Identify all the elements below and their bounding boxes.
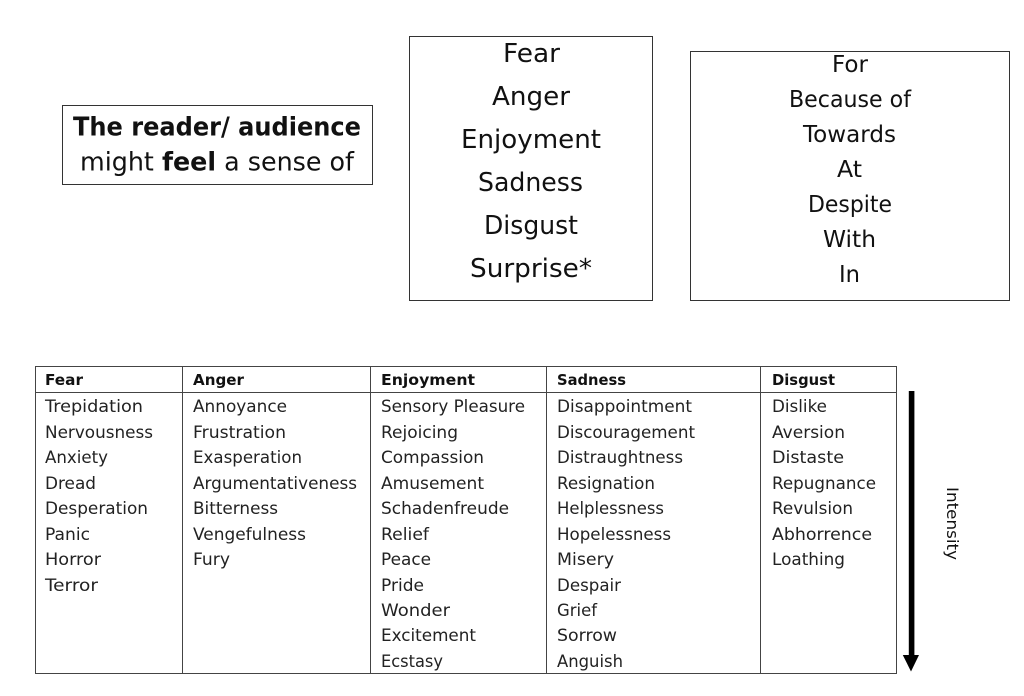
column: disgust: Disgust: [772, 371, 836, 389]
column: enjoyment: Compassion: [381, 448, 484, 467]
column: anger: Anger: [193, 371, 244, 389]
column: sadness: Resignation: [557, 474, 655, 493]
column: fear: Anxiety: [45, 448, 108, 467]
column: enjoyment: Peace: [381, 550, 431, 569]
column: enjoyment: Excitement: [381, 626, 477, 645]
column: sadness: Anguish: [557, 652, 623, 671]
column: enjoyment: Ecstasy: [381, 652, 443, 671]
box: prepositions: [690, 52, 1010, 300]
column: disgust: Distaste: [772, 448, 844, 467]
box: prepositions: At: [837, 157, 862, 183]
column: fear: Panic: [45, 525, 90, 544]
column: enjoyment: Relief: [381, 525, 430, 544]
column: enjoyment: Amusement: [381, 474, 485, 493]
box: core emotions: Disgust: [484, 211, 578, 241]
column: anger: Argumentativeness: [193, 474, 357, 493]
column: anger: Bitterness: [193, 499, 278, 518]
column: fear: Nervousness: [45, 423, 153, 442]
column: sadness: Sorrow: [557, 626, 617, 645]
box: prepositions: Because of: [789, 87, 912, 113]
box: core emotions: Surprise*: [470, 254, 592, 284]
box: core emotions: Fear: [503, 39, 560, 69]
column: sadness: Distraughtness: [557, 448, 683, 467]
box: prepositions: Towards: [802, 122, 896, 148]
box: prepositions: With: [823, 227, 876, 253]
column: fear: Trepidation: [44, 397, 143, 416]
box: core emotions: Anger: [492, 82, 570, 112]
column: sadness: Grief: [557, 601, 598, 620]
box: reader audience statement: might feel a sense of: [80, 148, 355, 178]
column: anger: Frustration: [193, 423, 286, 442]
column: disgust: Repugnance: [772, 474, 876, 493]
table: emotion intensity vocabulary: [35, 366, 896, 674]
column: fear: Dread: [45, 474, 96, 493]
column: enjoyment: Wonder: [381, 601, 450, 620]
label: intensity: Intensity: [943, 487, 962, 560]
column: fear: Fear: [45, 371, 83, 389]
box: reader audience statement: The reader/ audience: [73, 112, 361, 142]
column: enjoyment: Enjoyment: [381, 371, 476, 389]
box: core emotions: Enjoyment: [461, 125, 601, 155]
column: sadness: [557, 371, 696, 671]
column: sadness: Hopelessness: [557, 525, 671, 544]
column: sadness: Discouragement: [557, 423, 696, 442]
box: core emotions: Sadness: [478, 168, 583, 198]
column: sadness: Disappointment: [557, 397, 693, 416]
box: prepositions: In: [839, 262, 860, 288]
column: enjoyment: Schadenfreude: [381, 499, 509, 518]
column: sadness: Helplessness: [557, 499, 664, 518]
column: sadness: Sadness: [557, 371, 626, 389]
column: enjoyment: [381, 371, 525, 671]
column: anger: Fury: [193, 550, 230, 569]
column: anger: Exasperation: [193, 448, 302, 467]
column: fear: Desperation: [45, 499, 148, 518]
column: anger: Vengefulness: [193, 525, 306, 544]
box: core emotions: [410, 36, 652, 300]
column: disgust: Aversion: [772, 423, 845, 442]
column: disgust: Abhorrence: [772, 525, 872, 544]
column: anger: [193, 371, 357, 569]
box: reader audience statement: [62, 106, 372, 184]
column: disgust: [772, 371, 876, 569]
column: enjoyment: Sensory Pleasure: [381, 397, 525, 416]
column: enjoyment: Pride: [381, 576, 424, 595]
column: disgust: Revulsion: [772, 499, 853, 518]
column: anger: Annoyance: [193, 397, 287, 416]
box: prepositions: Despite: [808, 192, 892, 218]
arrow: increasing intensity: [903, 391, 919, 672]
column: sadness: Despair: [557, 576, 621, 595]
column: fear: [44, 371, 153, 595]
box: prepositions: For: [832, 52, 869, 78]
column: disgust: Loathing: [772, 550, 845, 569]
column: sadness: Misery: [557, 550, 614, 569]
column: enjoyment: Rejoicing: [381, 423, 458, 442]
column: fear: Terror: [44, 576, 98, 595]
column: fear: Horror: [45, 550, 101, 569]
column: disgust: Dislike: [772, 397, 827, 416]
